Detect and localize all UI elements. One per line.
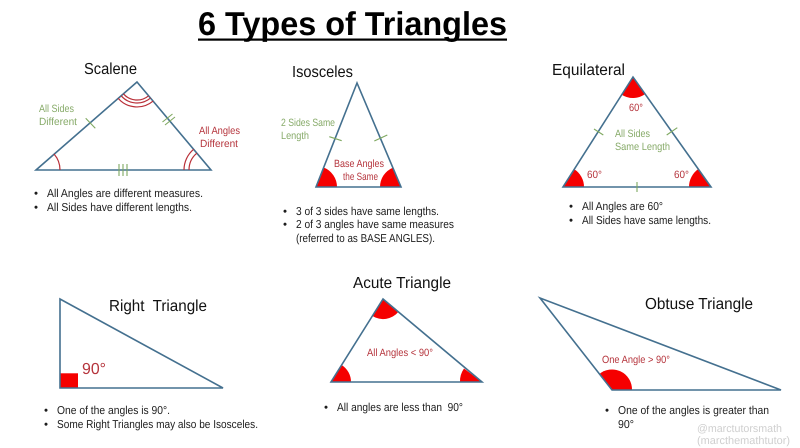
label: all sides same length: Same Length [615, 141, 670, 153]
bullet list: right triangle [44, 405, 258, 431]
bullet list: isosceles: • [283, 219, 287, 231]
panel: right triangle [44, 298, 258, 431]
label: two sides same length [281, 117, 335, 142]
heading: acute triangle: Acute Triangle [353, 275, 451, 292]
bullet list: scalene: • [34, 202, 38, 214]
label: all sides same length: All Sides [615, 128, 650, 140]
bullet list: equilateral: • [569, 201, 573, 213]
triangle: equilateral [563, 77, 711, 192]
panel: obtuse triangle [540, 296, 781, 431]
bullet list: isosceles: • [283, 206, 287, 218]
bullet list: equilateral: All Angles are 60° [582, 201, 663, 213]
label: all sides different: Different [39, 116, 77, 128]
triangle: scalene [36, 82, 211, 176]
bullet list: obtuse triangle [605, 405, 769, 431]
angle labels: 60 degrees: 60° [629, 102, 643, 114]
bullet list: scalene: All Sides have different lengths. [47, 202, 192, 214]
triangle: acute [331, 299, 482, 382]
watermark: @marctutorsmath [697, 423, 782, 435]
bullet list: right triangle: One of the angles is 90°. [57, 405, 170, 417]
bullet list: scalene: • [34, 188, 38, 200]
heading: equilateral: Equilateral [552, 62, 625, 79]
bullet list: right triangle: • [44, 419, 48, 431]
triangle: right [60, 299, 223, 388]
heading: right triangle: Right Triangle [109, 298, 207, 315]
label: all sides different [39, 103, 77, 128]
panel: equilateral [552, 62, 711, 227]
bullet list: acute triangle: All angles are less than 90° [337, 402, 463, 414]
bullet list: obtuse triangle: • [605, 405, 609, 417]
heading: scalene: Scalene [84, 61, 137, 78]
label: all angles different: All Angles [199, 125, 240, 137]
bullet list: scalene: All Angles are different measures. [47, 188, 203, 200]
label: all angles less than 90: All Angles < 90° [367, 347, 433, 359]
label: all angles different [199, 125, 240, 150]
triangle: isosceles [316, 83, 401, 187]
bullet list: obtuse triangle: 90° [618, 419, 634, 431]
watermark: (marcthemathtutor) [697, 435, 790, 447]
angle labels: 60 degrees: 60° [587, 169, 602, 181]
panel: acute triangle [324, 275, 482, 414]
panel: scalene [34, 61, 240, 214]
label: two sides same length: Length [281, 130, 309, 142]
label: base angles the same: Base Angles [334, 158, 384, 170]
heading: obtuse triangle: Obtuse Triangle [645, 296, 753, 313]
panel: isosceles [281, 64, 454, 245]
label: all sides different: All Sides [39, 103, 74, 115]
bullet list: scalene [34, 188, 203, 214]
bullet list: isosceles [283, 206, 454, 245]
angle labels: 60 degrees [587, 102, 689, 181]
bullet list: equilateral: All Sides have same lengths. [582, 215, 711, 227]
angle label: 90 degrees: 90° [82, 361, 106, 378]
triangle: obtuse [540, 298, 781, 390]
bullet list: isosceles: (referred to as BASE ANGLES). [296, 233, 435, 245]
label: two sides same length: 2 Sides Same [281, 117, 335, 129]
bullet list: right triangle: Some Right Triangles may also be Isosceles. [57, 419, 258, 431]
angle labels: 60 degrees: 60° [674, 169, 689, 181]
bullet list: right triangle: • [44, 405, 48, 417]
label: all sides same length [615, 128, 670, 153]
bullet list: equilateral [569, 201, 711, 227]
bullet list: equilateral: • [569, 215, 573, 227]
heading: isosceles: Isosceles [292, 64, 353, 81]
bullet list: isosceles: 3 of 3 sides have same lengths. [296, 206, 439, 218]
label: all angles different: Different [200, 138, 238, 150]
label: one angle greater than 90: One Angle > 90° [602, 354, 670, 366]
title: 6 Types of Triangles [198, 5, 507, 42]
label: base angles the same [334, 158, 384, 183]
bullet list: isosceles: 2 of 3 angles have same measures [296, 219, 454, 231]
label: base angles the same: the Same [343, 171, 378, 183]
watermark [697, 423, 790, 447]
bullet list: acute triangle: • [324, 402, 328, 414]
bullet list: obtuse triangle: One of the angles is greater than [618, 405, 769, 417]
